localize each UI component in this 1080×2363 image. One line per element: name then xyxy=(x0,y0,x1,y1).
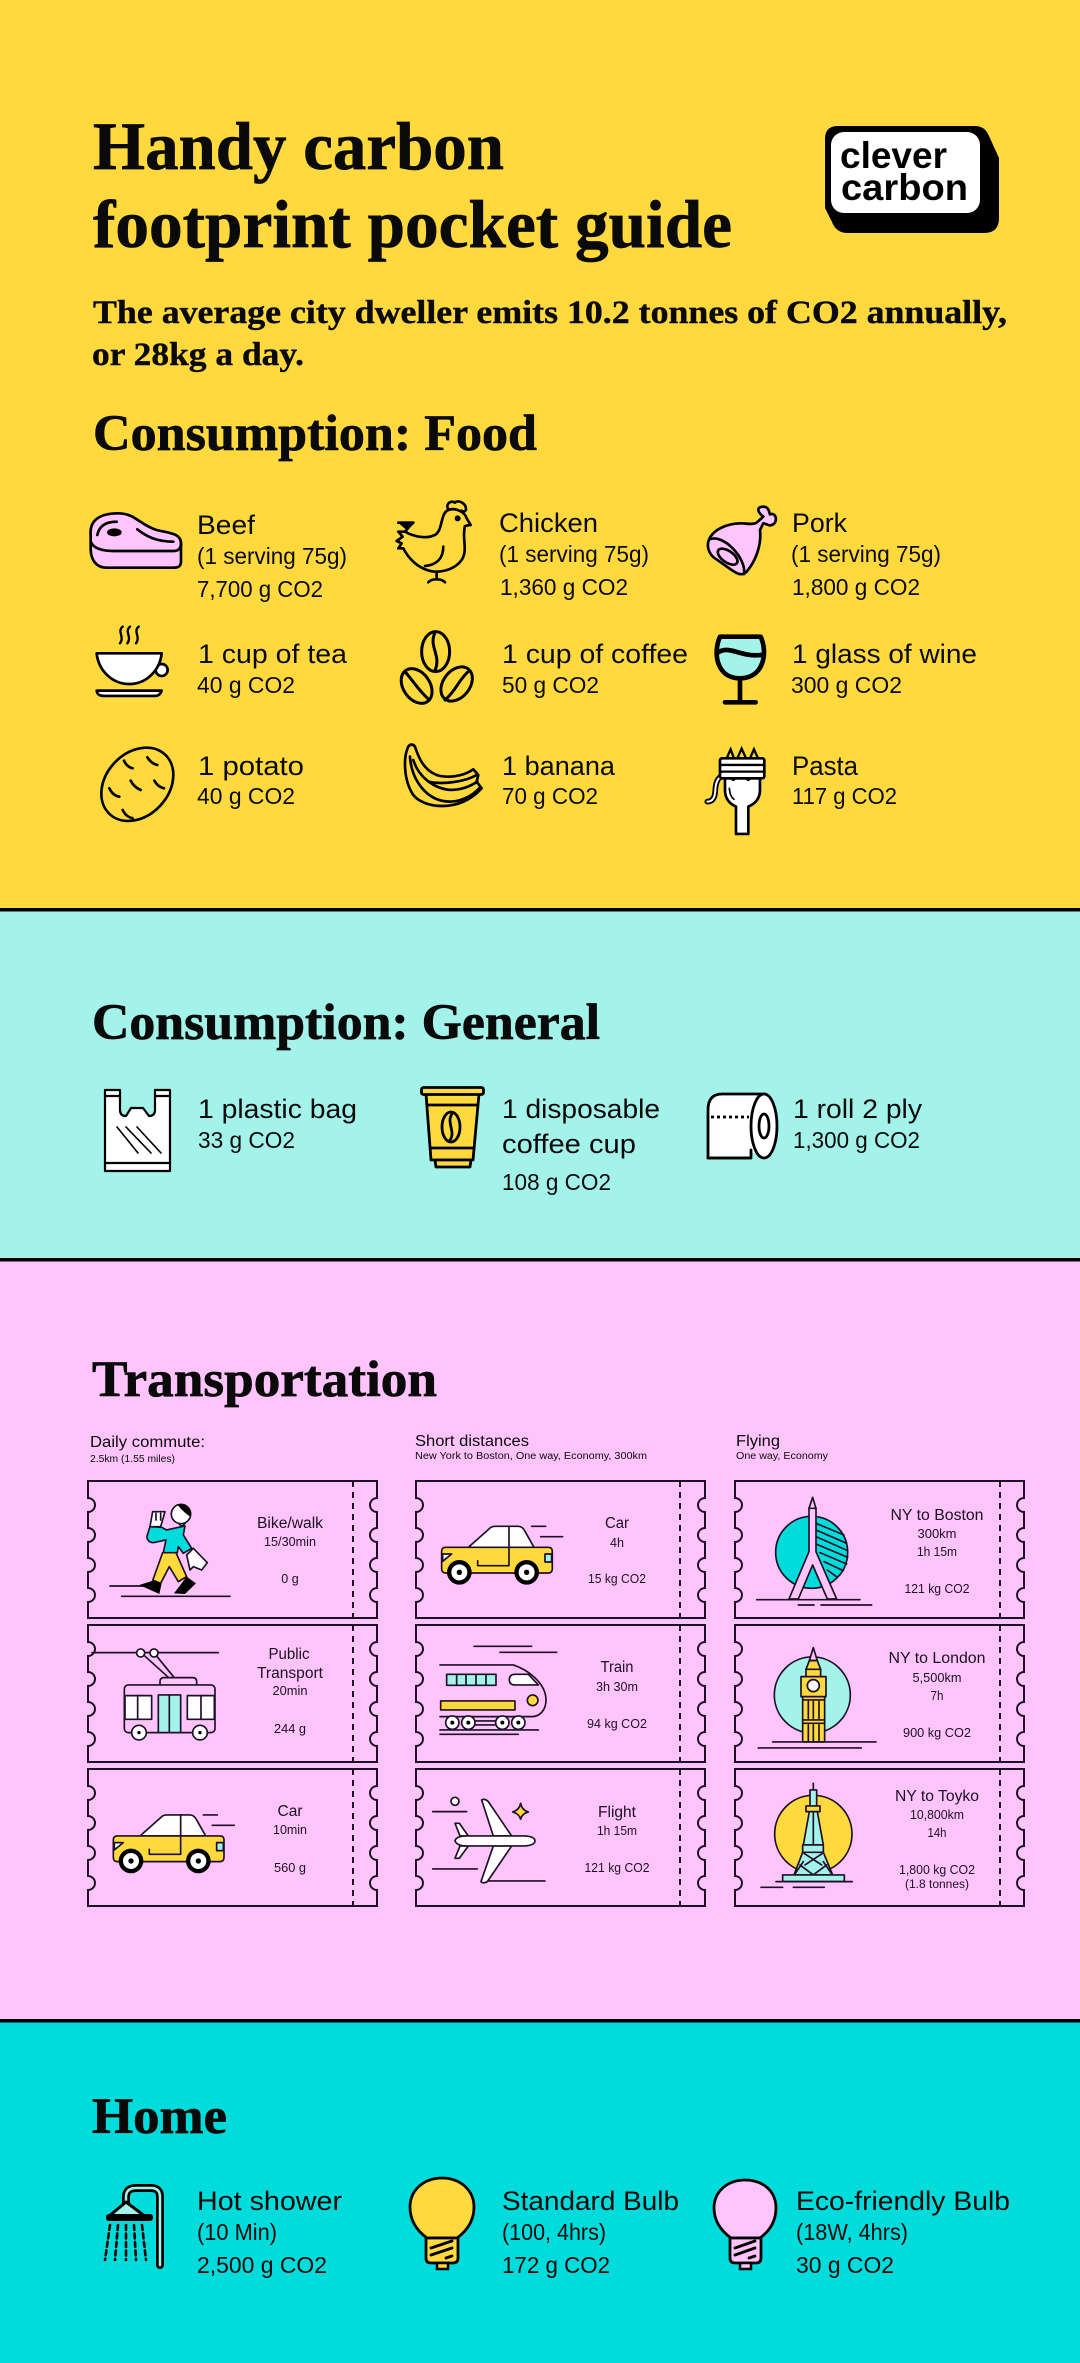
text: potato: 1 potato xyxy=(198,751,304,781)
icon: walking person xyxy=(110,1504,230,1596)
text: NY to Tokyo: (1.8 tonnes) xyxy=(905,1879,969,1891)
text: NY to Boston: 121 kg CO2 xyxy=(904,1582,970,1596)
text: pork: 1,800 g CO2 xyxy=(792,574,920,600)
title xyxy=(93,108,732,262)
text: bike/walk: 0 g xyxy=(281,1572,299,1586)
icon: standard bulb xyxy=(410,2178,474,2269)
text: coffee cup xyxy=(502,1094,660,1195)
text: beef: (1 serving 75g) xyxy=(197,543,347,569)
text: pork: Pork xyxy=(792,508,847,538)
text: NY to London: NY to London xyxy=(888,1650,986,1667)
text: NY to Tokyo: NY to Toyko xyxy=(895,1788,979,1805)
heading: home: Home xyxy=(92,2089,227,2145)
text: plastic bag: 1 plastic bag xyxy=(198,1094,357,1124)
text: NY to Boston: 300km xyxy=(918,1527,956,1541)
text: beef xyxy=(197,510,347,602)
icon: Big Ben xyxy=(758,1648,876,1748)
text: standard bulb xyxy=(502,2186,679,2278)
text: standard bulb: (100, 4hrs) xyxy=(502,2219,606,2245)
text: wine xyxy=(791,639,977,698)
icon: coffee beans xyxy=(395,632,479,709)
ticket: train xyxy=(416,1625,705,1762)
text: public transport xyxy=(257,1646,324,1736)
text: wine: 1 glass of wine xyxy=(792,639,977,669)
icon: coffee cup xyxy=(422,1088,484,1167)
text: coffee cup: 1 disposable xyxy=(502,1094,660,1124)
icon: pasta fork xyxy=(707,749,764,834)
column heading: daily commute: 2.5km (1.55 miles) xyxy=(90,1454,175,1465)
icon: shower xyxy=(105,2188,160,2265)
column heading: short distances: New York to Boston, One way, Economy, 300km xyxy=(415,1451,647,1462)
text: car short distance: 15 kg CO2 xyxy=(588,1572,646,1586)
heading: transportation: Transportation xyxy=(92,1352,437,1408)
text: pasta xyxy=(792,751,897,809)
intro text: or 28kg a day. xyxy=(92,337,304,373)
text: flight xyxy=(584,1804,650,1875)
text: toilet roll: 1,300 g CO2 xyxy=(793,1127,920,1153)
text: toilet roll: 1 roll 2 ply xyxy=(793,1094,923,1124)
text: pork: (1 serving 75g) xyxy=(791,541,941,567)
logo: clever carbon: carbon xyxy=(841,167,968,208)
icon: car xyxy=(442,1526,563,1585)
text: public transport: Transport xyxy=(257,1665,324,1682)
icon: potato xyxy=(87,733,188,835)
text: car short distance xyxy=(588,1515,646,1586)
text: NY to Tokyo: 10,800km xyxy=(910,1808,964,1822)
ticket: flight xyxy=(416,1769,705,1907)
text: eco bulb xyxy=(796,2186,1010,2278)
text: NY to Boston: NY to Boston xyxy=(890,1507,984,1524)
text: wine: 300 g CO2 xyxy=(791,672,902,698)
text: car commute: 10min xyxy=(273,1823,307,1837)
text: bike/walk: 15/30min xyxy=(264,1535,316,1549)
title: footprint pocket guide xyxy=(93,186,732,262)
column heading: flying: One way, Economy xyxy=(736,1451,828,1462)
text: toilet roll xyxy=(793,1094,923,1153)
text: chicken: Chicken xyxy=(499,508,598,538)
text: car short distance: Car xyxy=(605,1515,629,1532)
column heading: flying xyxy=(736,1433,828,1462)
text: eco bulb: Eco-friendly Bulb xyxy=(796,2186,1010,2216)
text: pasta: 117 g CO2 xyxy=(792,783,897,809)
text: tea xyxy=(197,639,348,698)
icon: Boston bridge xyxy=(757,1497,872,1605)
icon: toilet roll xyxy=(708,1094,777,1160)
text: hot shower: (10 Min) xyxy=(197,2219,277,2245)
icon: beef xyxy=(91,513,181,568)
panel: consumption food xyxy=(0,0,1080,909)
icon: trolleybus xyxy=(92,1649,218,1740)
icon: tea cup xyxy=(97,627,168,696)
title: Handy carbon xyxy=(93,108,504,184)
ticket: NY to Boston xyxy=(735,1481,1024,1618)
text: chicken: (1 serving 75g) xyxy=(499,541,649,567)
text: bike/walk: Bike/walk xyxy=(257,1515,323,1532)
icon: wine glass xyxy=(717,637,764,702)
text: pork xyxy=(791,508,941,600)
icon: Tokyo tower xyxy=(761,1783,852,1887)
heading: consumption general: Consumption: General xyxy=(92,995,600,1051)
text: NY to London: 7h xyxy=(930,1689,944,1703)
text: train: Train xyxy=(600,1659,634,1676)
icon: airplane xyxy=(433,1797,545,1883)
text: NY to Tokyo: 14h xyxy=(928,1826,947,1840)
text: coffee: 1 cup of coffee xyxy=(502,639,688,669)
text: eco bulb: 30 g CO2 xyxy=(796,2252,894,2278)
logo: clever carbon: clever xyxy=(840,135,947,176)
text: car commute xyxy=(273,1803,307,1875)
panel: transportation xyxy=(0,1258,1080,2021)
icon: car xyxy=(113,1815,234,1873)
icon: train xyxy=(440,1646,557,1734)
icon: pork xyxy=(708,507,776,574)
panel: home xyxy=(0,2019,1080,2363)
text: hot shower xyxy=(197,2186,342,2278)
panel: consumption general xyxy=(0,908,1080,1260)
text: banana: 1 banana xyxy=(502,751,616,781)
text: flight: 1h 15m xyxy=(597,1824,637,1838)
text: hot shower: Hot shower xyxy=(197,2186,342,2216)
text: pasta: Pasta xyxy=(792,751,859,781)
text: beef: 7,700 g CO2 xyxy=(197,576,323,602)
text: NY to Boston xyxy=(890,1507,984,1596)
text: coffee xyxy=(502,639,688,698)
column heading: flying: Flying xyxy=(736,1433,780,1450)
icon: banana xyxy=(405,745,482,806)
text: coffee: 50 g CO2 xyxy=(502,672,599,698)
text: chicken: 1,360 g CO2 xyxy=(500,574,628,600)
icon: chicken xyxy=(397,501,471,582)
icon: plastic bag xyxy=(105,1090,170,1171)
text: NY to London: 900 kg CO2 xyxy=(903,1726,971,1740)
column heading: daily commute xyxy=(90,1434,205,1465)
text: train: 94 kg CO2 xyxy=(587,1717,647,1731)
text: eco bulb: (18W, 4hrs) xyxy=(796,2219,908,2245)
text: car short distance: 4h xyxy=(610,1536,624,1550)
heading: consumption food: Consumption: Food xyxy=(93,406,537,462)
ticket: car commute xyxy=(88,1769,377,1907)
text: NY to London: 5,500km xyxy=(912,1671,962,1685)
text: coffee cup: 108 g CO2 xyxy=(502,1169,611,1195)
text: beef: Beef xyxy=(197,510,256,540)
ticket: NY to Tokyo xyxy=(735,1769,1024,1907)
icon: eco bulb xyxy=(714,2180,776,2269)
text: standard bulb: 172 g CO2 xyxy=(502,2252,610,2278)
column heading: short distances: Short distances xyxy=(415,1433,529,1450)
ticket: public transport xyxy=(88,1625,377,1762)
text: bike/walk xyxy=(257,1515,323,1586)
ticket: bike/walk xyxy=(88,1481,377,1618)
column heading: short distances xyxy=(415,1433,647,1462)
text: NY to Boston: 1h 15m xyxy=(917,1545,957,1559)
text: plastic bag: 33 g CO2 xyxy=(198,1127,295,1153)
text: banana: 70 g CO2 xyxy=(502,783,598,809)
text: tea: 1 cup of tea xyxy=(198,639,348,669)
text: standard bulb: Standard Bulb xyxy=(502,2186,679,2216)
text: car commute: Car xyxy=(278,1803,302,1820)
text: plastic bag xyxy=(198,1094,357,1153)
text: NY to Tokyo xyxy=(895,1788,979,1891)
text: potato xyxy=(197,751,304,809)
column heading: daily commute: Daily commute: xyxy=(90,1434,205,1451)
ticket: NY to London xyxy=(735,1625,1024,1762)
text: tea: 40 g CO2 xyxy=(197,672,295,698)
text: banana xyxy=(502,751,616,809)
logo: clever carbon xyxy=(825,126,999,233)
text: potato: 40 g CO2 xyxy=(197,783,295,809)
text: car commute: 560 g xyxy=(274,1861,306,1875)
intro text: The average city dweller emits 10.2 tonnes of CO2 annually, xyxy=(93,295,1007,331)
text: flight: Flight xyxy=(598,1804,637,1821)
text: chicken xyxy=(499,508,649,600)
text: flight: 121 kg CO2 xyxy=(584,1861,650,1875)
text: NY to London xyxy=(888,1650,986,1740)
text: hot shower: 2,500 g CO2 xyxy=(197,2252,327,2278)
text: public transport: Public xyxy=(268,1646,310,1663)
intro text xyxy=(92,295,1007,373)
ticket: car short distance xyxy=(416,1481,705,1618)
text: public transport: 244 g xyxy=(274,1722,306,1736)
text: coffee cup: coffee cup xyxy=(502,1129,636,1159)
text: train: 3h 30m xyxy=(596,1680,638,1694)
text: public transport: 20min xyxy=(272,1684,308,1698)
text: NY to Tokyo: 1,800 kg CO2 xyxy=(899,1863,975,1877)
text: train xyxy=(587,1659,647,1731)
